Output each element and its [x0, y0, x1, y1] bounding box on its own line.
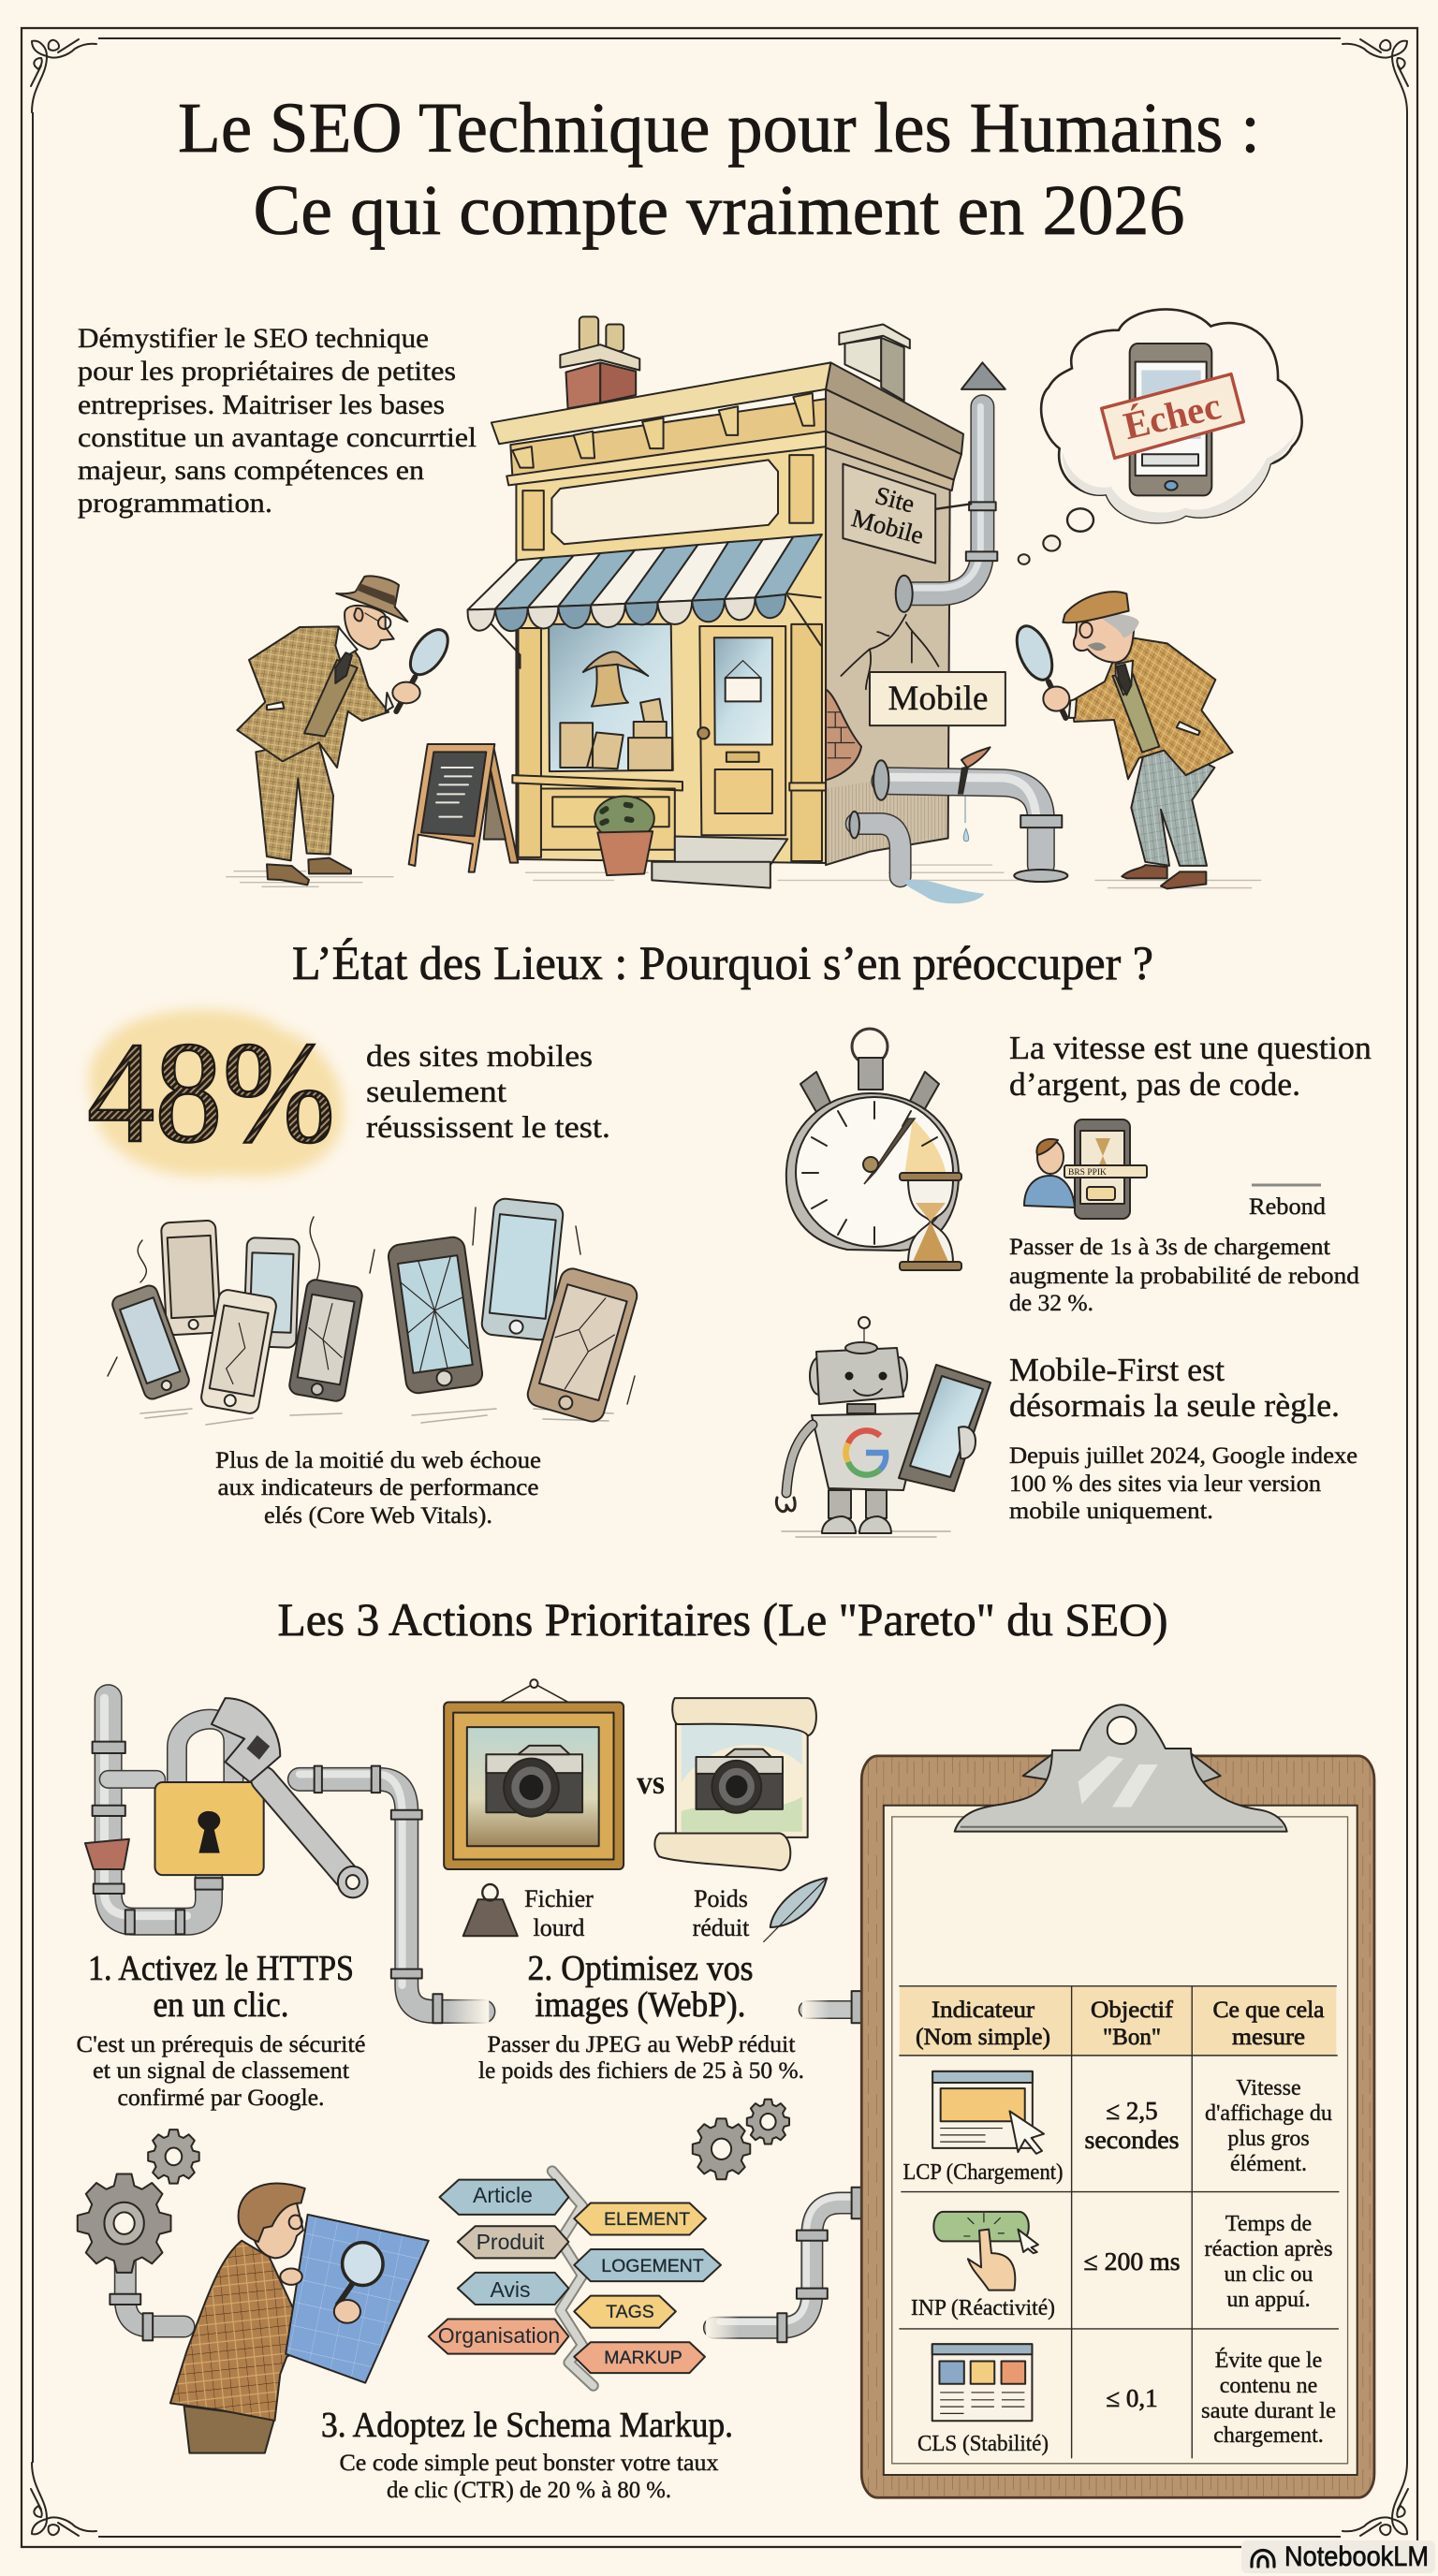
icon: gears right: [693, 2100, 789, 2179]
icon: person with loading phone: [1024, 1120, 1147, 1219]
action 1 text: confirmé par Google.: [118, 2086, 324, 2111]
intro text: [78, 323, 477, 519]
awning: [468, 534, 822, 668]
row inp: un appuí.: [1226, 2288, 1311, 2312]
phones caption: [215, 1448, 541, 1529]
action 2 text: images (WebP).: [536, 1985, 745, 2025]
phone 4: [200, 1289, 277, 1414]
icon: weight: [463, 1884, 518, 1936]
blank shop sign: [551, 460, 778, 544]
action 2 text: le poids des fichiers de 25 à 50 %.: [478, 2058, 804, 2084]
front facade: [516, 441, 826, 863]
mobile first body text: Depuis juillet 2024, Google indexe: [1009, 1443, 1357, 1469]
phone 6: [387, 1236, 484, 1395]
left inspector with magnifying glass: [227, 576, 455, 886]
icon: person with loading phone: BRS PPIK: [1068, 1168, 1107, 1178]
site mobile sign text: Site: [873, 481, 917, 519]
schema signpost labels: Avis: [490, 2277, 531, 2302]
title: Le SEO Technique pour les Humains :: [178, 89, 1260, 168]
table header text: "Bon": [1103, 2025, 1161, 2050]
thought bubble: [1019, 309, 1302, 564]
actions illustrations: [78, 1679, 862, 2453]
row inp: [911, 2212, 1333, 2320]
speed headline: [1009, 1030, 1372, 1103]
section heading: etat des lieux: L’État des Lieux : Pourquoi s’en préoccuper ?: [292, 938, 1153, 990]
table header text: Ce que cela: [1213, 1998, 1324, 2023]
intro text: Démystifier le SEO technique: [78, 323, 429, 354]
mobile first headline: désormais la seule règle.: [1009, 1387, 1340, 1424]
man reading blueprint: [170, 2183, 429, 2453]
small elbow pipe: [849, 812, 901, 876]
upper drain pipe: [896, 362, 1005, 612]
second inspector: [1010, 592, 1261, 888]
row inp: INP (Réactivité): [911, 2296, 1055, 2320]
table header text: (Nom simple): [916, 2025, 1050, 2050]
clipboard with metrics table: [861, 1705, 1374, 2497]
watercolor blob: [89, 1010, 344, 1177]
action 1 text: [77, 1949, 365, 2111]
phones caption: elés (Core Web Vitals).: [264, 1503, 492, 1529]
phone 5: [288, 1279, 363, 1402]
action 3 text: Ce code simple peut bonster votre taux: [339, 2451, 719, 2476]
rebond label: Rebond: [1249, 1194, 1327, 1220]
row cls: saute durant le: [1201, 2399, 1336, 2423]
action 1 text: et un signal de classement: [93, 2058, 349, 2084]
schema signpost labels: Organisation: [438, 2323, 560, 2348]
row cls: contenu ne: [1220, 2374, 1317, 2398]
wall cracks: [841, 615, 938, 689]
schema signpost labels: MARKUP: [604, 2348, 682, 2368]
paper: [884, 1806, 1357, 2475]
icon: feather: [764, 1878, 827, 1941]
row lcp: LCP (Chargement): [902, 2160, 1064, 2185]
stat description: des sites mobiles: [366, 1040, 593, 1074]
table grid: [900, 1986, 1339, 2458]
heavy file label: Fichier: [524, 1885, 594, 1912]
row lcp: Vitesse: [1236, 2076, 1301, 2100]
stat: 48 percent: 48%: [87, 1012, 335, 1173]
left chimney: [560, 316, 639, 408]
schema signpost labels: TAGS: [606, 2302, 654, 2322]
row lcp: ≤ 2,5: [1106, 2097, 1158, 2125]
hourglass: [900, 1173, 961, 1270]
schema signpost labels: [438, 2183, 704, 2368]
title: [178, 89, 1260, 250]
phones caption: Plus de la moitié du web échoue: [215, 1448, 541, 1473]
phone 8: [525, 1266, 639, 1425]
row lcp: d'affichage du: [1205, 2101, 1332, 2126]
google g logo: [845, 1430, 886, 1475]
wooden board: [861, 1756, 1374, 2497]
title: Ce qui compte vraiment en 2026: [253, 171, 1185, 250]
mobile first body text: [1009, 1443, 1357, 1524]
row cls: ≤ 0,1: [1106, 2384, 1158, 2412]
icon: padlock and wrench: [154, 1698, 368, 1897]
potted plant: [594, 797, 654, 875]
speed headline: La vitesse est une question: [1009, 1030, 1372, 1066]
icon: big gear left: [78, 2174, 170, 2273]
icon: inp button press: [933, 2212, 1038, 2291]
phone 2: [161, 1221, 221, 1335]
speed body text: augmente la probabilité de rebond: [1009, 1264, 1360, 1289]
speed headline: d’argent, pas de code.: [1009, 1066, 1300, 1103]
schema signpost labels: Article: [473, 2183, 533, 2207]
mobile sign text: Mobile: [888, 680, 988, 718]
wall sign: Mobile: [870, 672, 1005, 725]
icon: heavy gold frame: [444, 1679, 624, 1869]
failing phone: [1102, 344, 1243, 495]
front steps: [652, 836, 787, 888]
stat description: réussissent le test.: [366, 1111, 610, 1145]
action 1 text: 1. Activez le HTTPS: [88, 1949, 354, 1988]
action 3 text: 3. Adoptez le Schema Markup.: [321, 2406, 733, 2445]
table header text: Objectif: [1091, 1998, 1174, 2023]
right chimney: [839, 325, 910, 401]
row lcp: secondes: [1084, 2126, 1180, 2154]
row lcp: [902, 2076, 1332, 2185]
broken lower pipe: [873, 747, 1067, 882]
shop door: [697, 626, 785, 835]
pipe: schema to clipboard: [706, 2188, 861, 2345]
mobile first body text: mobile uniquement.: [1009, 1499, 1213, 1524]
exposed bricks: [826, 689, 861, 780]
row lcp: plus gros: [1227, 2127, 1310, 2151]
intro text: pour les propriétaires de petites: [78, 356, 456, 387]
row cls: Évite que le: [1215, 2349, 1322, 2373]
speed body text: Passer de 1s à 3s de chargement: [1009, 1235, 1330, 1260]
intro text: entreprises. Maitriser les bases: [78, 389, 445, 420]
action 3 text: de clic (CTR) de 20 % à 80 %.: [387, 2478, 671, 2503]
heavy file label: lourd: [534, 1914, 584, 1941]
table header band: [900, 1986, 1336, 2056]
icon: light scroll: [654, 1698, 816, 1870]
stat description: [366, 1040, 610, 1145]
heavy file label: [524, 1885, 594, 1941]
speed body text: [1009, 1235, 1360, 1316]
row lcp: élément.: [1230, 2152, 1307, 2176]
shop window: [549, 624, 673, 771]
action 2 text: Passer du JPEG au WebP réduit: [487, 2032, 796, 2057]
action 2 text: [478, 1949, 804, 2084]
intro text: majeur, sans compétences en: [78, 455, 424, 486]
wall sign: Site Mobile: [843, 464, 935, 564]
row inp: ≤ 200 ms: [1084, 2247, 1180, 2276]
shop front pillars: [518, 624, 822, 861]
schema signpost: [429, 2171, 721, 2386]
row cls: CLS (Stabilité): [917, 2432, 1049, 2456]
pipe network: https to images: [85, 1684, 223, 1934]
phone 3: [243, 1237, 300, 1348]
table header text: mesure: [1232, 2025, 1305, 2050]
vs label: vs: [637, 1764, 665, 1801]
water puddle: [904, 880, 984, 903]
illustration: storefront with leaking pipes: [468, 316, 1067, 903]
schema signpost labels: LOGEMENT: [601, 2256, 704, 2276]
window ledge and lower panel: [512, 775, 826, 850]
site mobile sign text: Mobile: [849, 504, 927, 549]
failure stamp text: Échec: [1120, 384, 1225, 447]
pipe stub to clipboard: [802, 1991, 862, 2026]
row cls: [917, 2349, 1336, 2456]
light file label: Poids: [694, 1885, 748, 1912]
icon: google robot holding phone: [776, 1317, 990, 1537]
mobile first headline: [1009, 1352, 1340, 1424]
icon: stopwatch and hourglass: [786, 1029, 961, 1270]
section heading: actions prioritaires: Les 3 Actions Prioritaires (Le "Pareto" du SEO): [277, 1593, 1168, 1646]
intro text: constitue un avantage concurrtiel: [78, 422, 477, 453]
phones caption: aux indicateurs de performance: [217, 1475, 539, 1500]
illustration: group of broken phones: [108, 1198, 639, 1425]
icon: cls window: [932, 2344, 1032, 2421]
schema signpost labels: Produit: [477, 2230, 545, 2254]
site mobile sign text: [849, 476, 933, 549]
action 1 text: C'est un prérequis de sécurité: [77, 2032, 365, 2057]
mobile first body text: 100 % des sites via leur version: [1009, 1471, 1322, 1497]
light file label: [693, 1885, 750, 1941]
rebond label: [1249, 1185, 1327, 1220]
action 1 text: en un clic.: [154, 1985, 288, 2025]
metal clip: [955, 1705, 1287, 1832]
action 3 text: [321, 2406, 733, 2503]
light file label: réduit: [693, 1914, 750, 1941]
schema signpost labels: ELEMENT: [604, 2209, 690, 2230]
table header text: [916, 1998, 1324, 2050]
pipe: third step: [110, 2261, 184, 2340]
speed body text: de 32 %.: [1009, 1291, 1093, 1316]
side wall: [826, 433, 950, 865]
icon: small gear left: [148, 2130, 199, 2184]
chalkboard sandwich sign: [409, 744, 518, 872]
ground hatching: [526, 865, 1022, 880]
right inspector and thought bubble: [1010, 309, 1302, 888]
row inp: un clic ou: [1225, 2262, 1313, 2287]
icon: lcp window: [932, 2071, 1044, 2154]
row inp: réaction après: [1204, 2237, 1333, 2261]
action 2 text: 2. Optimisez vos: [528, 1949, 753, 1988]
mobile first headline: Mobile-First est: [1009, 1352, 1225, 1388]
stat description: seulement: [366, 1076, 506, 1109]
phone 7: [481, 1198, 564, 1340]
intro text: programmation.: [78, 488, 272, 519]
table header text: Indicateur: [932, 1998, 1035, 2023]
row cls: chargement.: [1213, 2423, 1324, 2448]
facade panels: [522, 455, 814, 549]
phone 1: [110, 1283, 191, 1401]
cornice brackets: [512, 393, 814, 468]
row inp: Temps de: [1225, 2212, 1312, 2236]
